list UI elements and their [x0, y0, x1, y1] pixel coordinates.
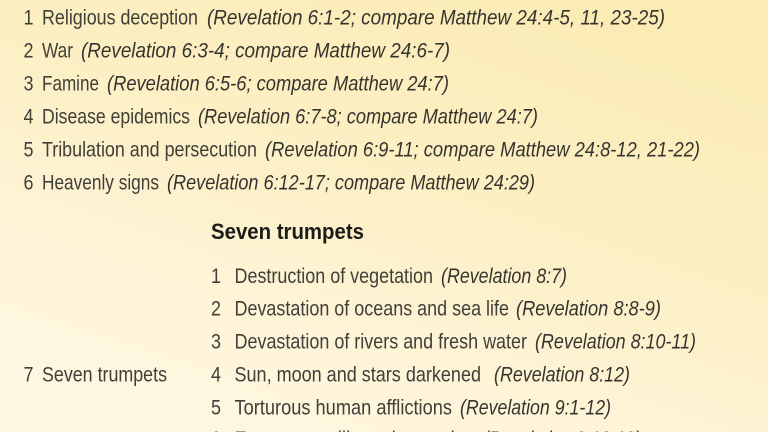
row 4: disease epidemics: (Revelation 6:7-8; compare Matthew 24:7) [198, 106, 538, 128]
row 6: heavenly signs [24, 172, 535, 194]
row 3: famine: Famine [42, 72, 99, 96]
trumpet 3: devastation of rivers: Devastation of rivers and fresh water [234, 330, 527, 354]
row 1: religious deception [24, 6, 665, 30]
row 5: tribulation and persecution: Tribulation and persecution [42, 138, 257, 162]
trumpet 2: devastation of oceans: (Revelation 8:8-9) [516, 298, 661, 320]
row 6: heavenly signs: 6 [24, 172, 34, 194]
row 2: war: (Revelation 6:3-4; compare Matthew 24:6-7) [81, 40, 450, 62]
row 4: disease epidemics [24, 106, 538, 128]
list: seven trumpets events 1 to 6 [211, 265, 696, 432]
trumpet 1: destruction of vegetation: 1 [211, 265, 221, 288]
row 5: tribulation and persecution: (Revelation 6:9-11; compare Matthew 24:8-12, 21-22) [265, 138, 700, 162]
trumpet 2: devastation of oceans: 2 [211, 298, 221, 320]
row 5: tribulation and persecution: 5 [24, 138, 34, 162]
trumpet 3: devastation of rivers: 3 [211, 330, 221, 354]
row 2: war: 2 [24, 40, 34, 62]
trumpet 1: destruction of vegetation: Destruction of vegetation [234, 265, 433, 288]
row 1: religious deception: Religious deception [42, 6, 198, 30]
trumpet 5: torturous human afflictions: (Revelation 9:1-12) [460, 396, 611, 420]
trumpet 4: sun, moon and stars darkened: Sun, moon and stars darkened [234, 364, 481, 386]
row 3: famine: (Revelation 6:5-6; compare Matthew 24:7) [107, 72, 449, 96]
row 4: disease epidemics: 4 [24, 106, 34, 128]
list: seven seals events 1 to 6 [24, 6, 700, 194]
row 5: tribulation and persecution [24, 138, 700, 162]
trumpet 6: enormous military destruction, cut off by the bottom edge [211, 428, 641, 432]
trumpet 4: sun, moon and stars darkened: 4 [211, 364, 221, 386]
row 7: seven trumpets label: 7 [24, 364, 34, 386]
trumpet 5: torturous human afflictions: 5 [211, 396, 221, 420]
trumpet 4: sun, moon and stars darkened: (Revelation 8:12) [494, 364, 630, 386]
row 6: heavenly signs: Heavenly signs [42, 172, 159, 194]
row 4: disease epidemics: Disease epidemics [42, 106, 190, 128]
row 6: heavenly signs: (Revelation 6:12-17; compare Matthew 24:29) [167, 172, 535, 194]
row 3: famine: 3 [24, 72, 34, 96]
trumpet 1: destruction of vegetation [211, 265, 567, 288]
trumpet 5: torturous human afflictions [211, 396, 611, 420]
trumpet 5: torturous human afflictions: Torturous human afflictions [234, 396, 452, 420]
row 1: religious deception: (Revelation 6:1-2; compare Matthew 24:4-5, 11, 23-25) [207, 6, 665, 30]
trumpet 2: devastation of oceans: Devastation of oceans and sea life [234, 298, 509, 320]
trumpet 4: sun, moon and stars darkened [211, 364, 630, 386]
row 1: religious deception: 1 [24, 6, 34, 30]
heading: seven trumpets: Seven trumpets [211, 219, 364, 244]
row 2: war: War [42, 40, 73, 62]
trumpet 1: destruction of vegetation: (Revelation 8:7) [441, 265, 567, 288]
trumpet 3: devastation of rivers: (Revelation 8:10-11) [535, 330, 696, 354]
row 7: seven trumpets label: Seven trumpets [42, 364, 167, 386]
